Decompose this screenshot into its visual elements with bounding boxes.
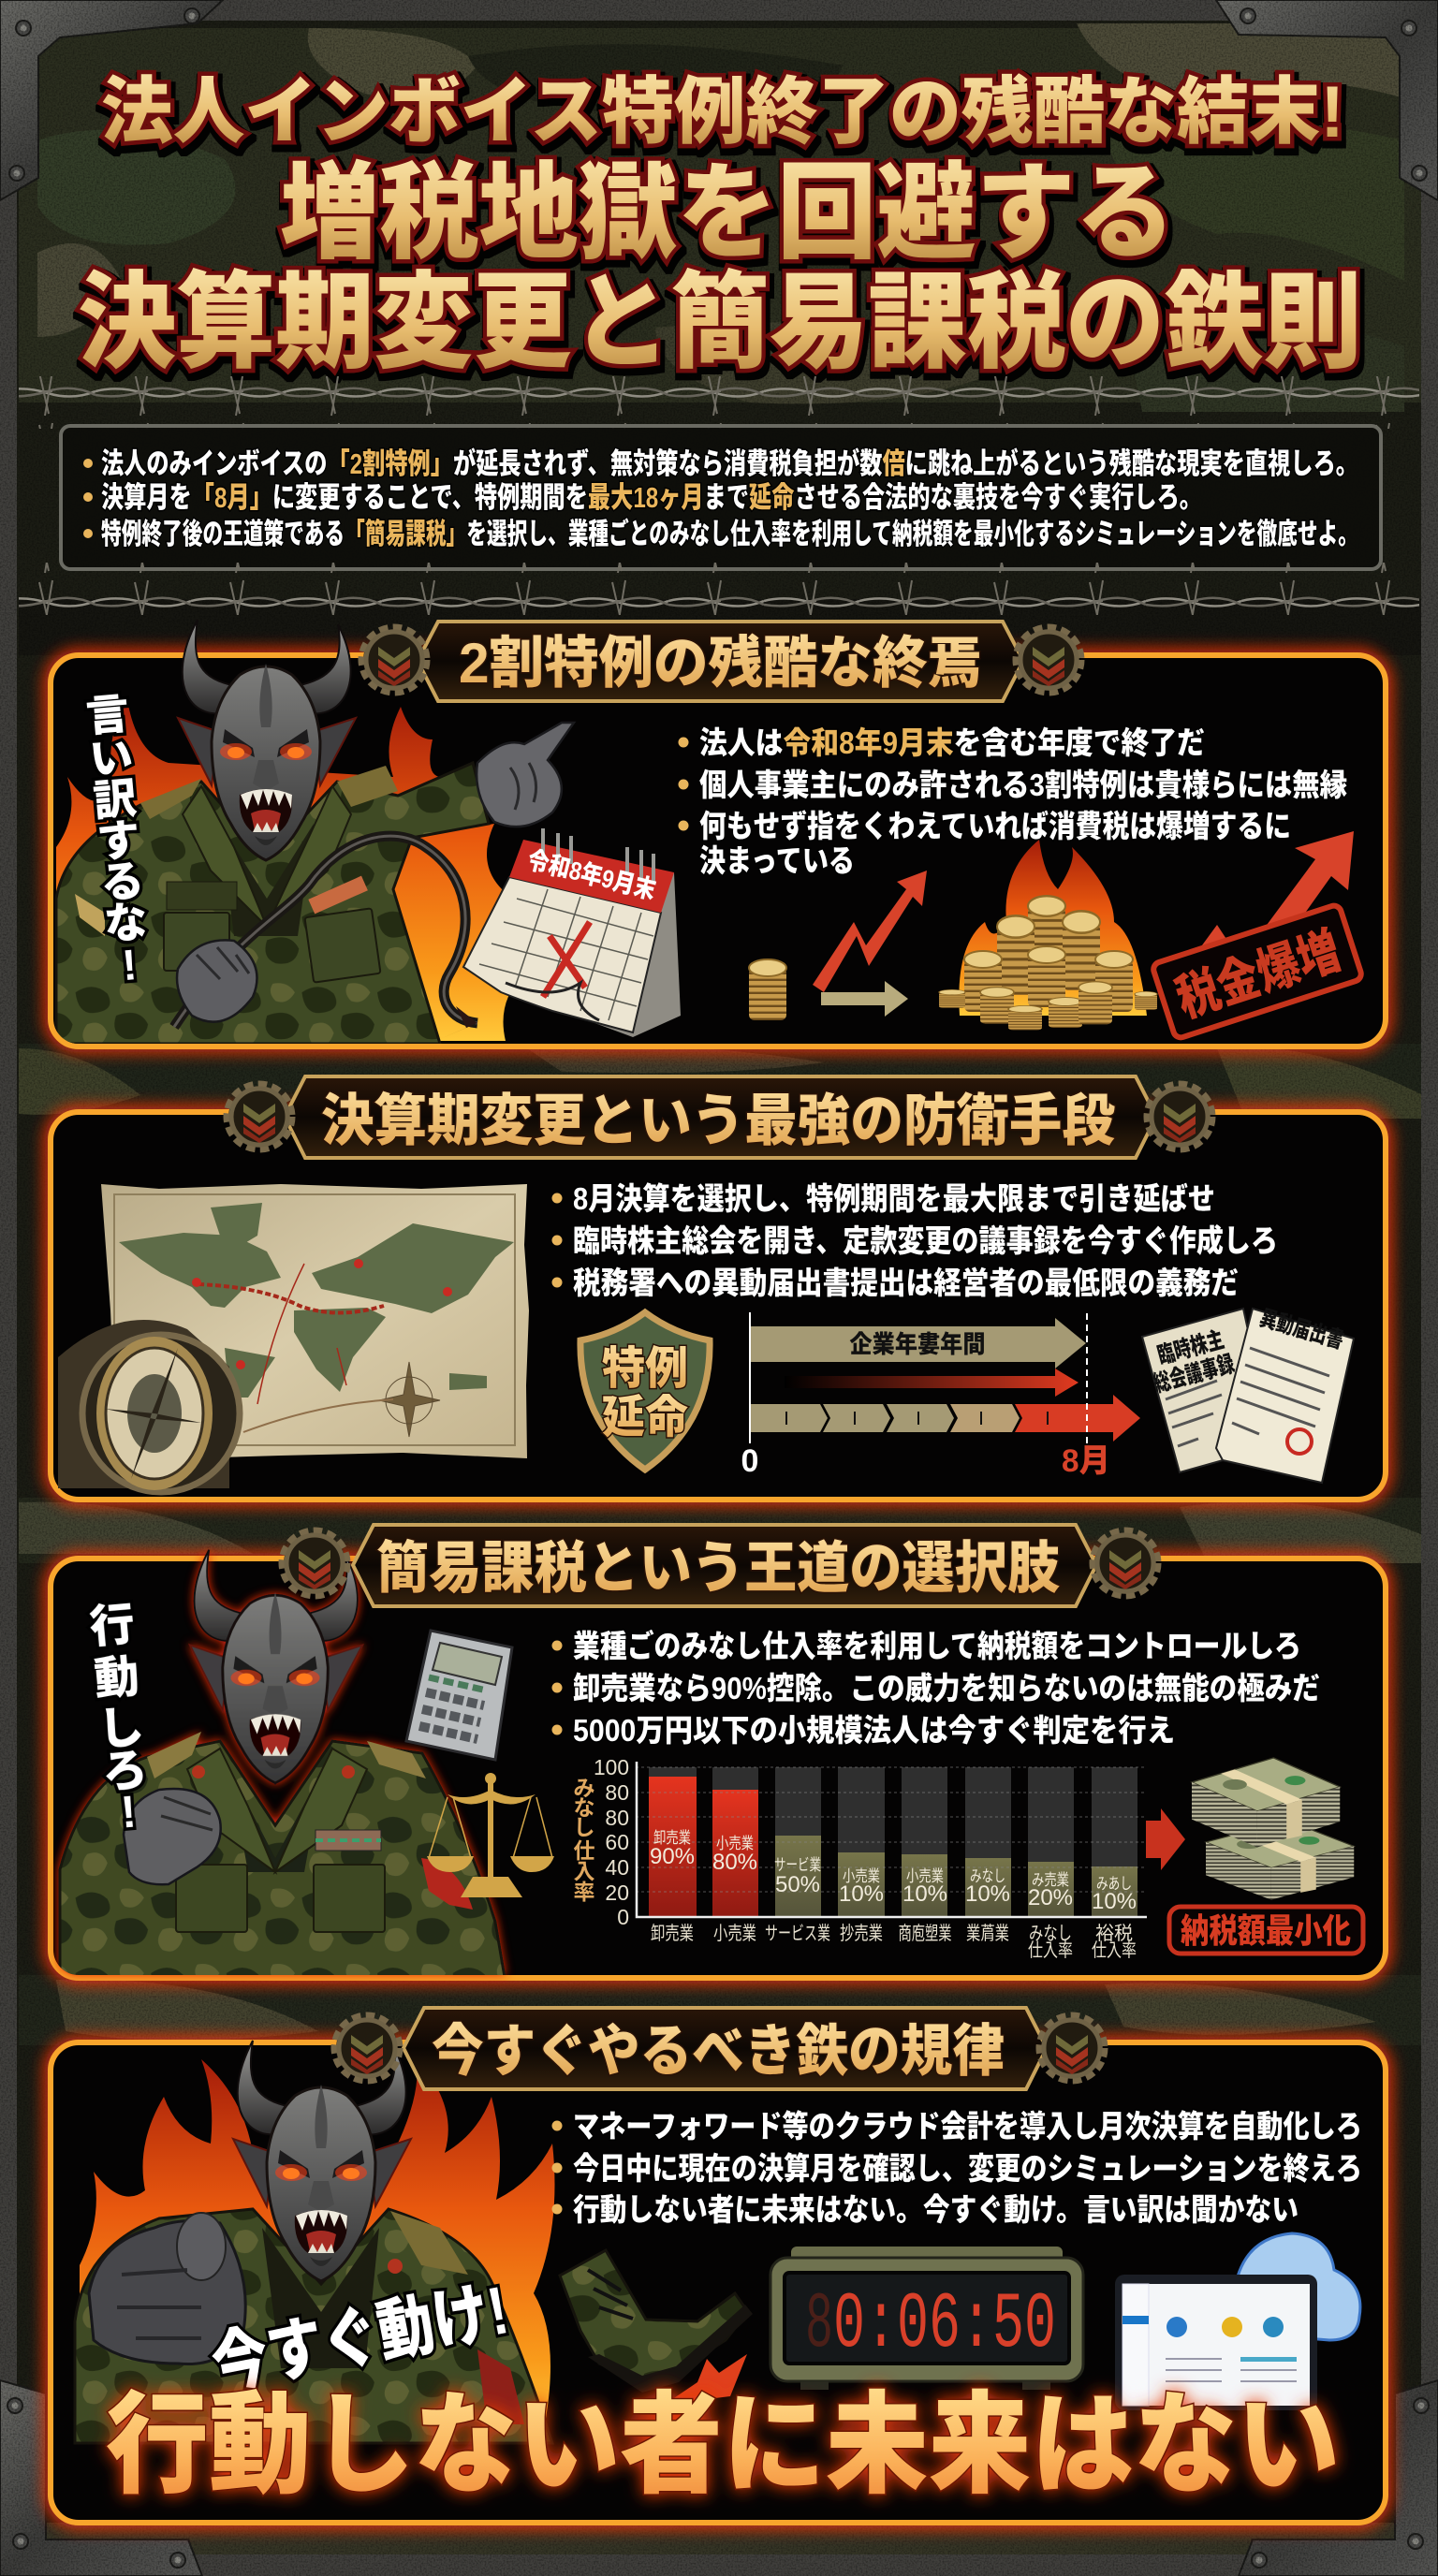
illustration: demon pointing forward: [75, 2041, 552, 2443]
bar labels: 10%: [1092, 1889, 1137, 1914]
illustration: old world map: [101, 1184, 529, 1458]
bar labels: 小売業: [716, 1835, 754, 1852]
x axis labels: 抄売業: [840, 1923, 883, 1944]
y axis labels: 40: [605, 1855, 629, 1880]
y axis labels: [594, 1755, 629, 1929]
main title: 決算期変更と簡易課税の鉄則: [78, 264, 1362, 381]
heading plaque 1: [363, 622, 1079, 701]
x axis labels: 業菺業: [966, 1923, 1009, 1944]
shout text: no excuses: !: [120, 940, 139, 989]
icon: shield: [580, 1312, 710, 1470]
bar labels: み売業: [1032, 1871, 1069, 1889]
summary box: [61, 426, 1381, 569]
bullet list 1: 個人事業主にのみ許される3割特例は貴様らには無縁: [699, 768, 1347, 802]
icon: scales: [427, 1773, 554, 1897]
icon: money stacks: [1192, 1758, 1354, 1900]
y axis labels: 60: [605, 1830, 629, 1854]
heading plaque 1: 2割特例の残酷な終焉: [459, 632, 982, 695]
bar labels: 小売業: [906, 1867, 944, 1885]
bullet list 2: 税務署への異動届出書提出は経営者の最低限の義務だ: [573, 1266, 1239, 1300]
main title: 増税地獄を回避する: [280, 154, 1175, 271]
bar labels: 10%: [902, 1881, 947, 1907]
bar labels: 10%: [965, 1881, 1010, 1907]
x axis labels: 裕税: [1095, 1923, 1133, 1944]
x axis labels: 仕入率: [1092, 1939, 1137, 1961]
illustration: fire behind demon: [56, 700, 524, 1041]
bar tracks: [649, 1767, 1137, 1917]
bullet list 4: 行動しない者に未来はない。今すぐ動け。言い訳は聞かない: [573, 2192, 1299, 2227]
icon: digital countdown timer: 0:06:50: [833, 2281, 1056, 2370]
barbed wire lower: [19, 563, 1419, 615]
bullet list 2: 8月決算を選択し、特例期間を最大限まで引き延ばせ: [573, 1181, 1215, 1216]
main title: 法人インボイス特例終了の残酷な結末!: [101, 70, 1344, 153]
timeline diagram: 8月: [1062, 1443, 1110, 1479]
y axis labels: 80: [605, 1780, 629, 1805]
timeline diagram: [741, 1312, 1140, 1479]
y axis title: みなし仕入率: [573, 1776, 595, 1904]
heading plaque 3: 簡易課税という王道の選択肢: [376, 1537, 1060, 1600]
illustration: demon with raised fist: [60, 1550, 505, 1977]
bullet list 2: [552, 1181, 1278, 1300]
bar labels: みなし: [970, 1867, 1005, 1885]
icon: cloud: [1214, 2233, 1360, 2340]
icon: digital countdown timer: [770, 2247, 1083, 2390]
x axis labels: みなし: [1029, 1924, 1072, 1944]
illustration: demon pointing with whip: [56, 620, 574, 1044]
bullet list 3: 5000万円以下の小規模法人は今すぐ判定を行え: [573, 1713, 1175, 1748]
x axis labels: 商庖塑業: [899, 1923, 951, 1944]
bar values: [649, 1777, 1137, 1917]
arrow: small rising: [813, 871, 927, 992]
icon: tablet with cloud accounting: [1115, 2275, 1317, 2410]
shout text: take action: !: [119, 1787, 139, 1838]
bar labels: 80%: [712, 1850, 757, 1875]
bullet list 1: 決まっている: [699, 843, 855, 878]
shout text: move now: 今すぐ動け!: [206, 2273, 514, 2404]
x axis labels: 卸売業: [651, 1923, 694, 1944]
shout text: no excuses: 言い訳するな: [84, 689, 150, 949]
icon: boot: [560, 2250, 753, 2406]
arrow: beige to pile: [821, 981, 908, 1017]
slogan: no future without action: 行動しない者に未来はない: [106, 2384, 1340, 2508]
icon: shield: 延命: [602, 1393, 688, 1442]
icon: shield: 特例: [602, 1344, 688, 1394]
bullet list 1: [678, 725, 1347, 878]
bar labels: 10%: [839, 1881, 884, 1907]
barbed wire upper: [19, 376, 1419, 429]
bar labels: 50%: [775, 1872, 820, 1897]
heading plaque 2: 決算期変更という最強の防衛手段: [321, 1090, 1115, 1152]
x axis labels: サービス業: [765, 1923, 830, 1944]
icon: documents: 総会議事録: [1151, 1351, 1238, 1398]
bar labels: 卸売業: [653, 1829, 691, 1847]
y axis labels: 20: [605, 1881, 629, 1905]
illustration: antique compass and gears: [58, 1320, 240, 1492]
bar labels: みあし: [1096, 1875, 1132, 1893]
bullet list 3: 業種ごのみなし仕入率を利用して納税額をコントロールしろ: [573, 1629, 1301, 1663]
panel 2: fiscal month change: [51, 1076, 1386, 1500]
bar labels: 小売業: [843, 1867, 880, 1885]
bullet list 1: 法人は令和8年9月末を含む年度で終了だ: [699, 725, 1205, 760]
heading plaque 4: [336, 2008, 1103, 2089]
icon: calculator: [406, 1631, 512, 1760]
bullet list 3: 卸売業なら90%控除。この威力を知らないのは無能の極みだ: [573, 1671, 1320, 1705]
icon: documents: [1142, 1306, 1354, 1483]
bar labels: 20%: [1028, 1885, 1073, 1910]
x axis labels: 仕入率: [1028, 1939, 1073, 1961]
arrow: big red surge: [1161, 831, 1354, 1018]
panel 1: end of special rule: [51, 620, 1386, 1046]
stamp: tax surge: 税金爆増: [1169, 922, 1347, 1028]
icon: digital countdown timer: 8: [805, 2281, 833, 2370]
icon: documents: 臨時株主: [1155, 1326, 1226, 1369]
icon: documents: 異動届出書: [1256, 1306, 1346, 1354]
bar labels: 90%: [650, 1844, 695, 1869]
x axis labels: 小売業: [713, 1923, 756, 1944]
bullet list 1: 何もせず指をくわえていれば消費税は爆増するに: [699, 809, 1291, 843]
icon: burning coin pile: [939, 840, 1157, 1030]
timeline diagram: 0: [741, 1443, 758, 1479]
arrow: chart to money: [1146, 1808, 1185, 1870]
bullet list 4: [552, 2109, 1362, 2227]
summary box: 決算月を「8月」に変更することで、特例期間を最大18ヶ月まで延命させる合法的な裏技を今すぐ実行しろ。: [101, 481, 1202, 514]
bar chart: [573, 1755, 1147, 1961]
timeline diagram: 企業年婁年間: [850, 1330, 985, 1358]
y axis labels: 80: [605, 1806, 629, 1830]
panel 3: simplified taxation: [51, 1525, 1386, 1978]
badge: minimize tax: 納税額最小化: [1181, 1911, 1351, 1950]
heading plaque 3: [284, 1525, 1156, 1606]
bullet list 3: [552, 1629, 1320, 1748]
y axis labels: 0: [617, 1905, 629, 1929]
x axis labels: [651, 1923, 1137, 1961]
heading plaque 4: 今すぐやるべき鉄の規律: [432, 2020, 1005, 2083]
panel 4: discipline and call to action: [51, 2008, 1386, 2523]
y axis labels: 100: [594, 1755, 629, 1779]
icon: small coin stack: [749, 959, 786, 1020]
icon: calendar: [463, 828, 681, 1037]
bullet list 2: 臨時株主総会を開き、定款変更の議事録を今すぐ作成しろ: [573, 1223, 1278, 1258]
icon: calendar: 令和8年9月末: [524, 846, 659, 904]
bar labels: サービ業: [774, 1856, 821, 1874]
heading plaque 2: [228, 1076, 1211, 1158]
bar labels: [650, 1829, 1137, 1914]
main title: [78, 70, 1362, 381]
shout text: take action: 行動しろ: [88, 1600, 150, 1798]
illustration: fire behind demon 3: [80, 2059, 554, 2434]
